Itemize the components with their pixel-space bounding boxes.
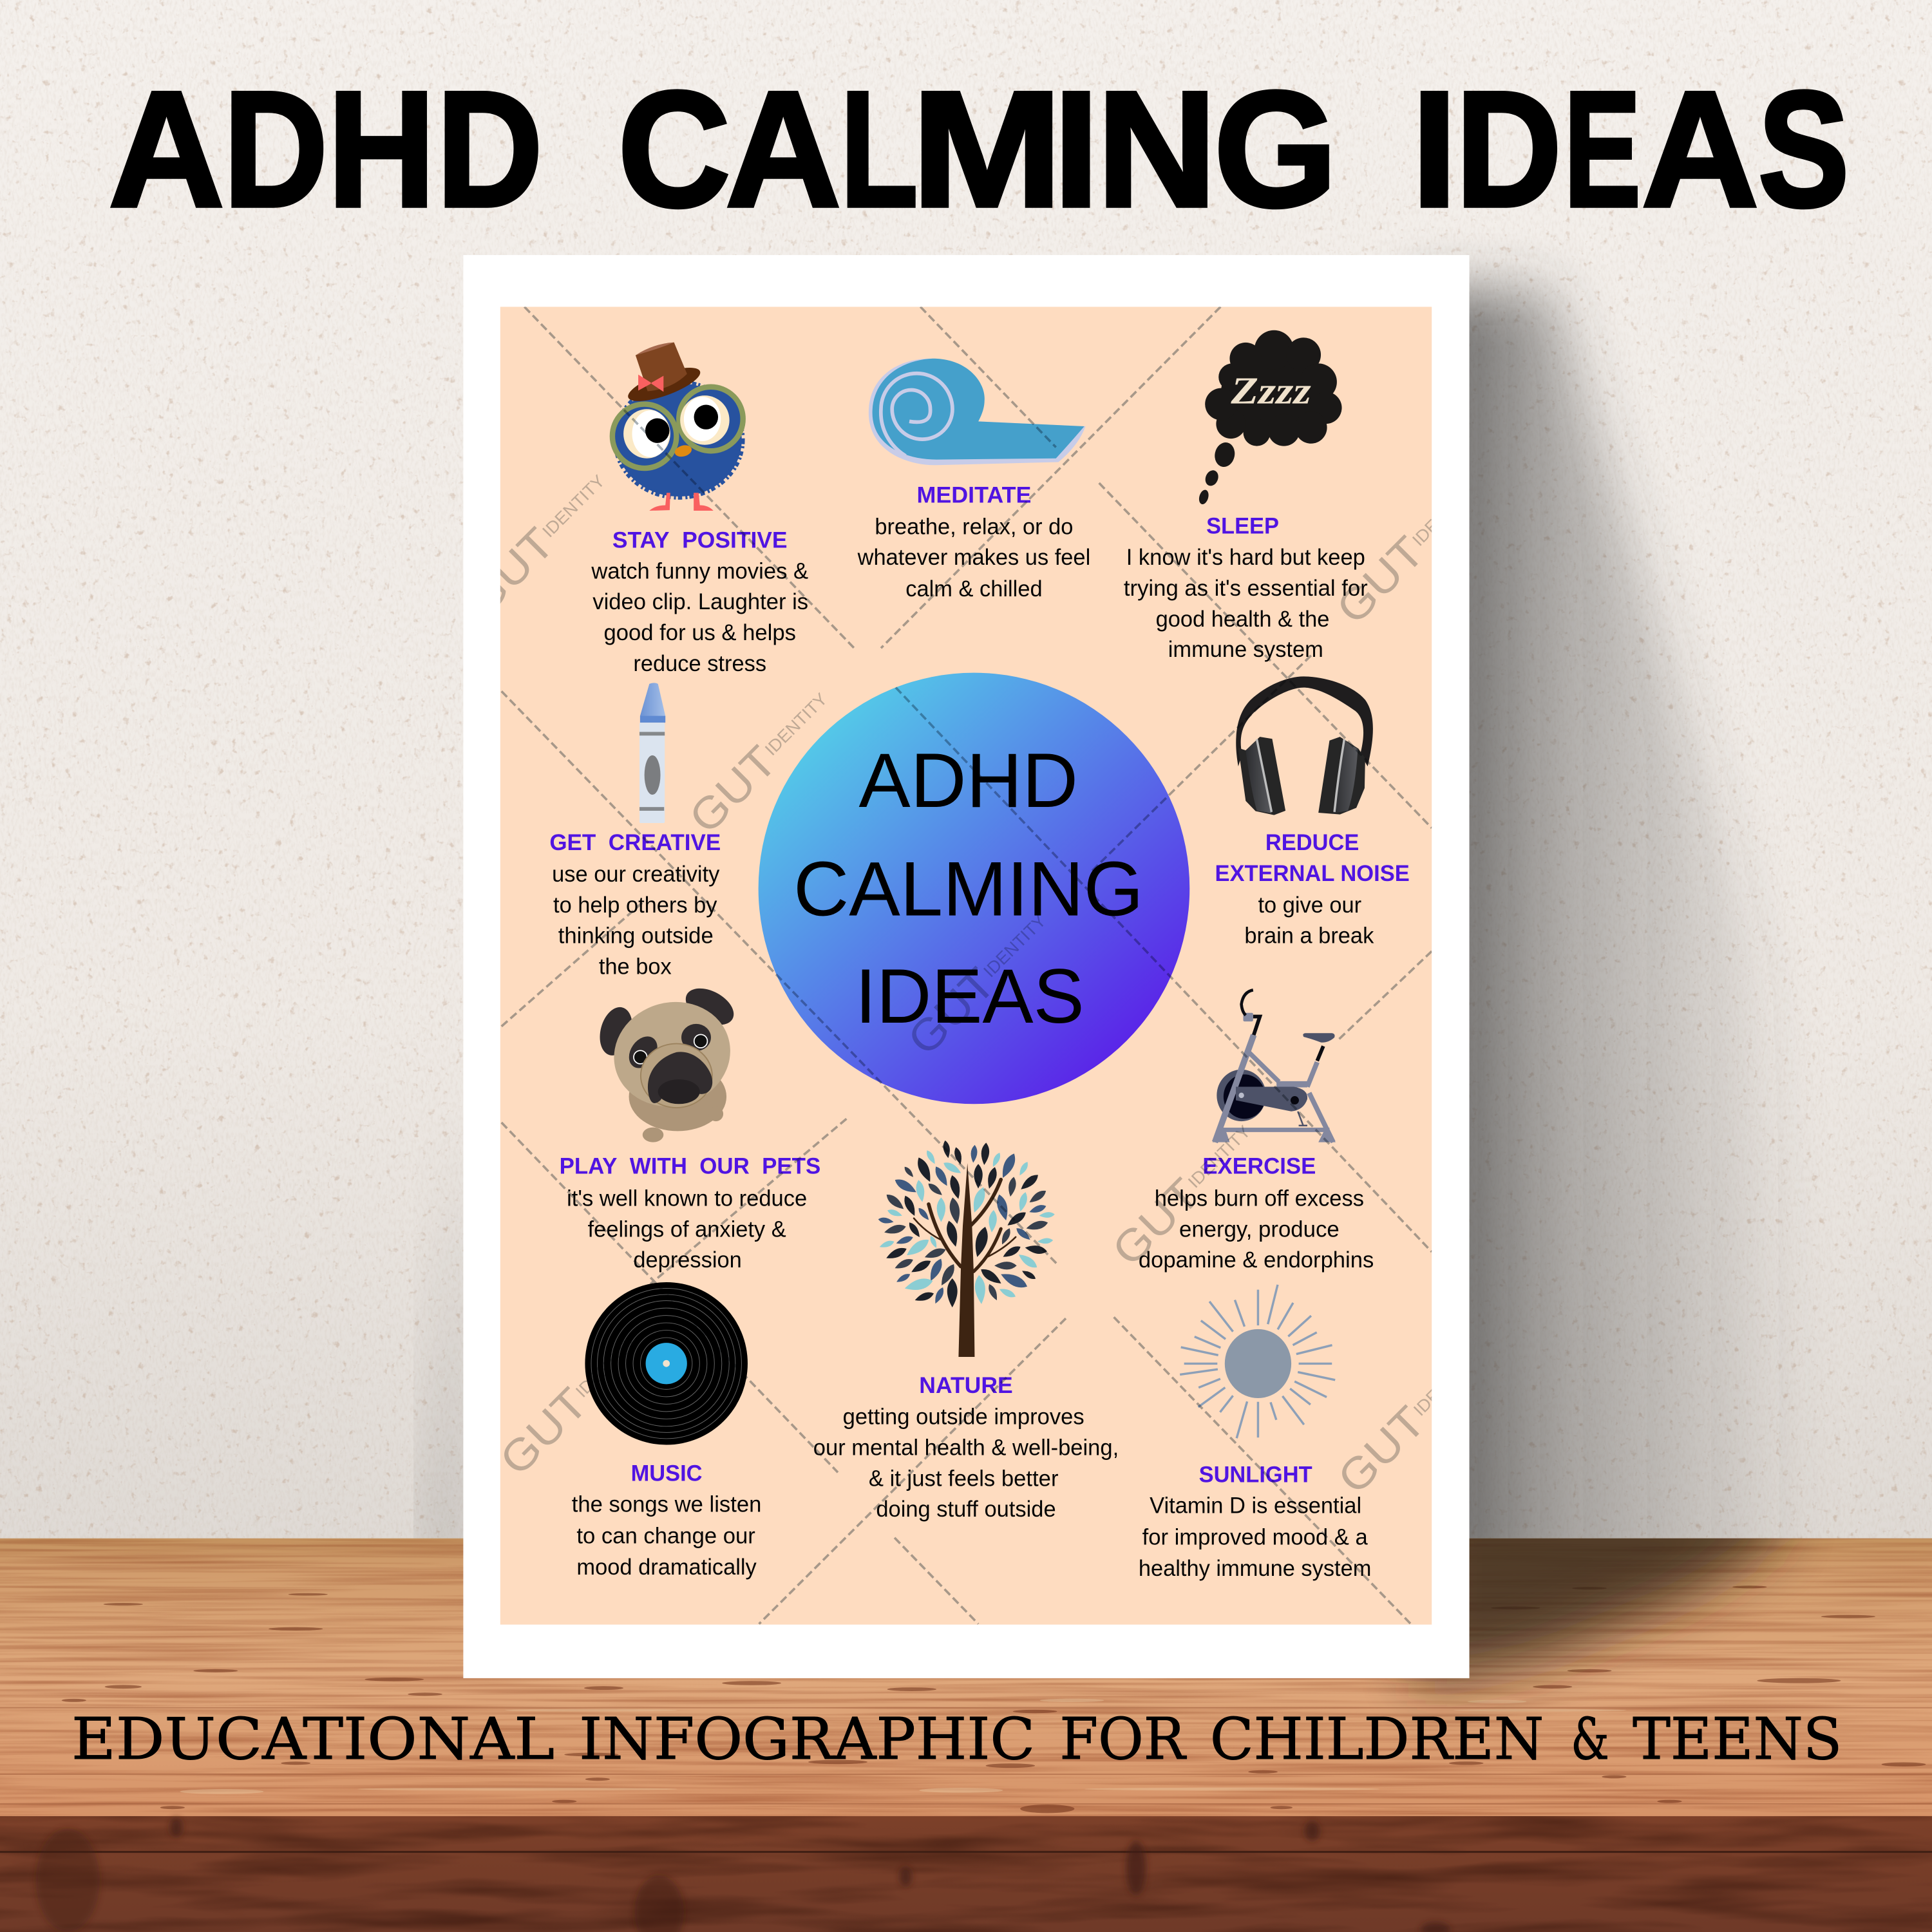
text: music description bbox=[572, 1492, 761, 1580]
heading: meditate: MEDITATE bbox=[916, 483, 1031, 508]
text: sleep description: I know it's hard but keep bbox=[1126, 544, 1365, 570]
heading: nature: NATURE bbox=[919, 1373, 1013, 1398]
icon: pug bbox=[595, 981, 742, 1142]
text: meditate description bbox=[857, 513, 1090, 601]
text: music description: mood dramatically bbox=[576, 1554, 757, 1580]
text: get creative description: thinking outside bbox=[558, 923, 714, 949]
text: reduce external noise description: brain a break bbox=[1244, 923, 1374, 949]
text: sleep description: immune system bbox=[1168, 636, 1323, 662]
central circle with heading: CALMING bbox=[793, 847, 1144, 933]
text: reduce external noise description bbox=[1244, 892, 1374, 949]
text: pets description: feelings of anxiety & bbox=[588, 1216, 786, 1242]
panel: white poster frame bbox=[463, 255, 1470, 1678]
item: music bbox=[572, 1282, 761, 1580]
icon: sun bbox=[1180, 1285, 1335, 1438]
subtitle: CHILDREN bbox=[1210, 1705, 1544, 1772]
wooden table top bbox=[0, 1539, 1932, 1817]
text: exercise description: energy, produce bbox=[1179, 1216, 1340, 1242]
item: get creative bbox=[549, 683, 721, 979]
icon: tree bbox=[878, 1140, 1055, 1357]
icon: thought cloud with Zzzz bbox=[1197, 330, 1342, 506]
text: reduce external noise description: to give our bbox=[1258, 892, 1361, 918]
subtitle: TEENS bbox=[1633, 1705, 1842, 1772]
icon: blue crayon bbox=[639, 683, 665, 823]
main title: A bbox=[1642, 57, 1759, 242]
text: meditate description: whatever makes us feel bbox=[857, 544, 1090, 570]
main title: D bbox=[223, 57, 328, 242]
central circle with heading: IDEAS bbox=[855, 954, 1084, 1039]
item: play with our pets bbox=[560, 981, 820, 1273]
text: stay positive description: reduce stress bbox=[633, 650, 766, 676]
heading: stay positive: STAY POSITIVE bbox=[612, 527, 788, 553]
text: nature description: our mental health & well-being, bbox=[813, 1435, 1119, 1461]
main title: S bbox=[1758, 57, 1849, 242]
text: stay positive description bbox=[591, 558, 808, 676]
watermark overlay: IDENTITY bbox=[1184, 1122, 1255, 1191]
watermark overlay bbox=[457, 307, 1492, 1624]
text: sleep description: trying as it's essential for bbox=[1124, 575, 1368, 601]
text: pets description: it's well known to reduce bbox=[567, 1186, 807, 1211]
heading: reduce external noise: EXTERNAL NOISE bbox=[1215, 861, 1410, 886]
text: music description: the songs we listen bbox=[572, 1492, 761, 1517]
watermark overlay: GUT bbox=[1327, 527, 1434, 634]
heading: music: MUSIC bbox=[631, 1461, 703, 1486]
heading: reduce external noise: REDUCE bbox=[1265, 830, 1359, 855]
heading: sleep: SLEEP bbox=[1206, 513, 1279, 538]
item: nature bbox=[813, 1140, 1119, 1522]
text: meditate description: breathe, relax, or do bbox=[875, 513, 1073, 539]
heading: exercise: EXERCISE bbox=[1202, 1153, 1316, 1179]
text: stay positive description: good for us & helps bbox=[603, 620, 796, 645]
main title: M bbox=[911, 57, 1063, 242]
item: sunlight bbox=[1139, 1285, 1371, 1581]
watermark overlay: IDENTITY bbox=[1410, 1350, 1480, 1419]
main title: G bbox=[1214, 57, 1337, 242]
wooden table front edge bbox=[0, 1816, 1932, 1932]
watermark overlay: IDENTITY bbox=[538, 471, 609, 541]
main title: D bbox=[437, 57, 543, 242]
text: exercise description: helps burn off excess bbox=[1155, 1186, 1364, 1211]
text: sunlight description: for improved mood & a bbox=[1142, 1524, 1368, 1549]
text: exercise description bbox=[1139, 1186, 1374, 1273]
heading: reduce external noise bbox=[1215, 830, 1410, 886]
icon: vinyl record bbox=[585, 1282, 748, 1444]
subtitle: EDUCATIONAL bbox=[71, 1705, 554, 1772]
subtitle: & bbox=[1571, 1705, 1609, 1772]
main title: L bbox=[840, 57, 918, 242]
text: sunlight description bbox=[1139, 1492, 1371, 1581]
text: get creative description: use our creativity bbox=[552, 861, 720, 887]
watermark overlay: IDENTITY bbox=[1408, 480, 1479, 550]
text: nature description: getting outside improves bbox=[843, 1404, 1084, 1430]
heading: get creative: GET CREATIVE bbox=[549, 830, 721, 855]
subtitle bbox=[71, 1705, 1842, 1772]
main title: I bbox=[1412, 57, 1457, 242]
item: stay positive bbox=[591, 343, 808, 676]
subtitle: FOR bbox=[1059, 1705, 1187, 1772]
heading: play with our pets: PLAY WITH OUR PETS bbox=[560, 1153, 820, 1179]
poster shadow on wall bbox=[1417, 290, 1811, 1589]
heading: sunlight: SUNLIGHT bbox=[1199, 1463, 1312, 1488]
main title: A bbox=[726, 57, 841, 242]
item: exercise bbox=[1139, 990, 1374, 1273]
item: meditate bbox=[857, 359, 1090, 601]
main title: C bbox=[618, 57, 730, 242]
text: get creative description: the box bbox=[599, 953, 672, 979]
text: meditate description: calm & chilled bbox=[905, 576, 1043, 601]
panel: peach poster area bbox=[457, 307, 1492, 1625]
watermark overlay: GUT bbox=[1103, 1169, 1209, 1275]
watermark overlay: GUT bbox=[679, 736, 786, 843]
text: sleep description: good health & the bbox=[1156, 606, 1329, 632]
main title: A bbox=[109, 57, 224, 242]
text: get creative description: to help others by bbox=[553, 892, 717, 918]
item: sleep bbox=[1124, 330, 1368, 662]
watermark overlay: GUT bbox=[490, 1378, 597, 1485]
wall background bbox=[0, 0, 1932, 1540]
watermark overlay: IDENTITY bbox=[980, 911, 1050, 981]
text: sleep description bbox=[1124, 544, 1368, 662]
text: stay positive description: watch funny movies & bbox=[591, 558, 808, 583]
icon: thought cloud with Zzzz: Zzzz bbox=[1230, 370, 1311, 412]
main title: E bbox=[1564, 57, 1641, 242]
text: exercise description: dopamine & endorphins bbox=[1139, 1247, 1374, 1273]
main title: D bbox=[1456, 57, 1562, 242]
watermark overlay: IDENTITY bbox=[572, 1331, 642, 1401]
text: nature description: & it just feels better bbox=[869, 1465, 1059, 1491]
main title: N bbox=[1097, 57, 1217, 242]
text: get creative description bbox=[552, 861, 720, 979]
poster shadow on table bbox=[1417, 1491, 1786, 1685]
central circle with heading bbox=[759, 673, 1189, 1104]
text: sunlight description: Vitamin D is essential bbox=[1150, 1492, 1361, 1518]
main title: I bbox=[1054, 57, 1099, 242]
icon: owl with top hat bbox=[612, 343, 743, 511]
watermark overlay: GUT bbox=[457, 518, 564, 625]
watermark overlay: GUT bbox=[898, 958, 1005, 1065]
main title bbox=[109, 57, 1849, 242]
item: reduce external noise bbox=[1215, 676, 1410, 949]
text: pets description bbox=[567, 1186, 807, 1273]
main title: H bbox=[328, 57, 435, 242]
text: sunlight description: healthy immune system bbox=[1139, 1555, 1371, 1581]
icon: rolled yoga mat bbox=[869, 359, 1086, 465]
text: music description: to can change our bbox=[576, 1523, 755, 1549]
icon: headphones bbox=[1236, 676, 1373, 815]
text: stay positive description: video clip. Laughter is bbox=[592, 589, 808, 614]
watermark overlay: IDENTITY bbox=[761, 689, 831, 759]
watermark overlay: GUT bbox=[1328, 1397, 1435, 1503]
central circle with heading: ADHD bbox=[859, 738, 1078, 824]
subtitle: INFOGRAPHIC bbox=[579, 1705, 1035, 1772]
left shadow bbox=[413, 1300, 464, 1538]
icon: exercise bike bbox=[1213, 990, 1336, 1142]
text: nature description: doing stuff outside bbox=[876, 1496, 1056, 1522]
text: pets description: depression bbox=[633, 1247, 742, 1273]
text: nature description bbox=[813, 1404, 1119, 1522]
